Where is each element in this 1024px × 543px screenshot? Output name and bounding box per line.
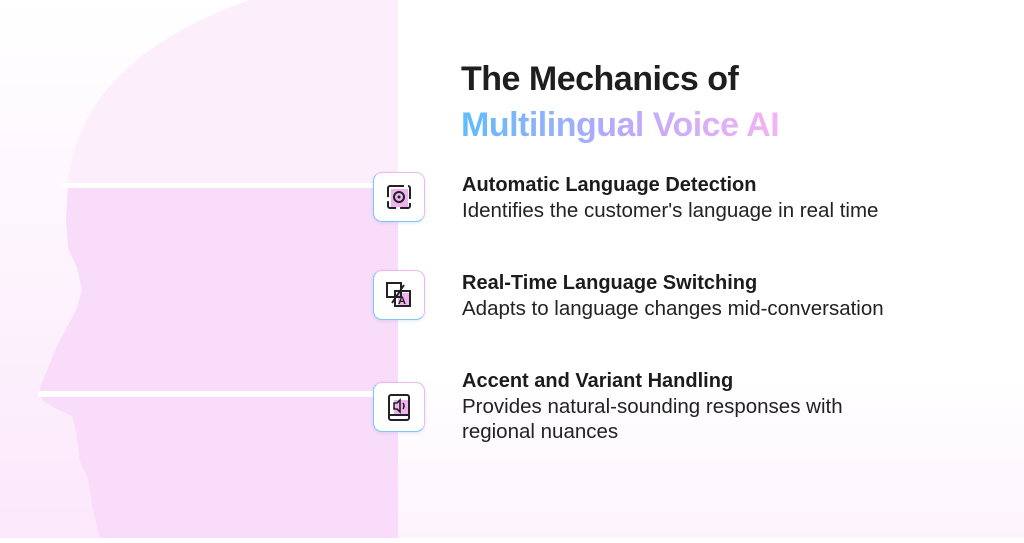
title: The Mechanics of	[461, 60, 738, 98]
item 2 text: Real-Time Language Switching	[462, 272, 757, 294]
item 1 text: Automatic Language Detection	[462, 174, 756, 196]
icon: translate	[373, 270, 425, 320]
icon: audio book	[373, 382, 425, 432]
item 3 text: Accent and Variant Handling	[462, 370, 733, 392]
item 2 text: Adapts to language changes mid-conversation	[462, 297, 884, 320]
icon: translate: A	[398, 295, 406, 307]
item 3 text	[462, 370, 843, 443]
item 2 text	[462, 272, 884, 320]
icon: language detection gear	[373, 172, 425, 222]
item 3 text: Provides natural-sounding responses with	[462, 395, 843, 418]
item 1 text: Identifies the customer's language in real time	[462, 199, 878, 222]
title	[461, 60, 779, 144]
title: Multilingual Voice AI	[461, 106, 779, 144]
item 3 text: regional nuances	[462, 420, 618, 443]
item 1 text	[462, 174, 878, 222]
